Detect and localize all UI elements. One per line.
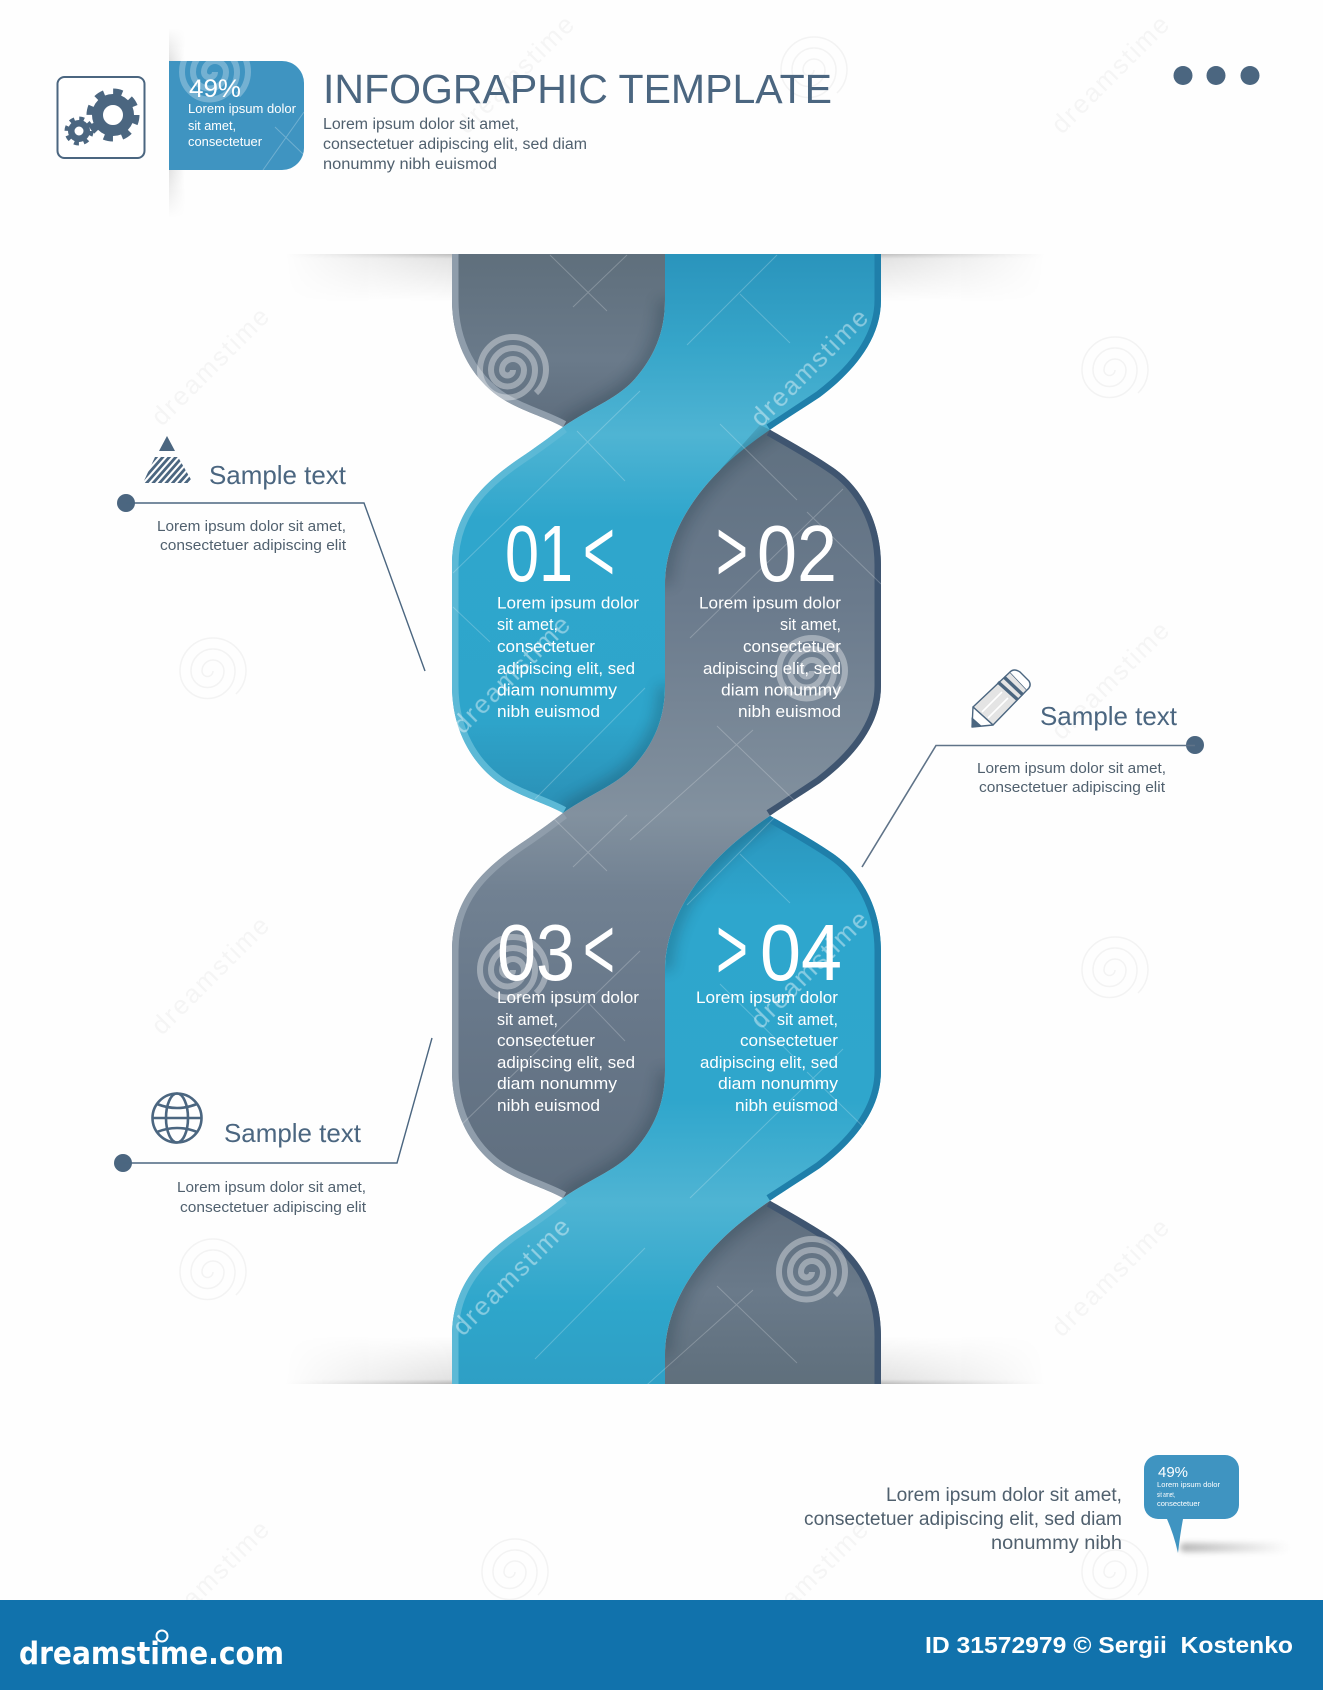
description: consectetuer adipiscing elit [160, 537, 347, 554]
ribbon watermark marks: dreamstime [744, 903, 875, 1034]
number 04: 04 [760, 908, 842, 997]
number 02: 02 [757, 509, 837, 598]
text block 04: nibh euismod [735, 1096, 838, 1115]
ribbon inner shadows [560, 298, 776, 1357]
faint background watermarks: dreamstime [1045, 1211, 1176, 1342]
speech bubble [1144, 1455, 1290, 1553]
icon: pyramid [131, 436, 211, 486]
icon: pencil [972, 670, 1030, 727]
faint background watermarks: dreamstime [1045, 614, 1176, 745]
ribbon watermark marks: dreamstime [744, 301, 875, 432]
chevron right: > [716, 899, 748, 998]
header [58, 39, 1260, 173]
callout: globe sample text [114, 1038, 432, 1216]
strand: blue upper S [452, 254, 881, 813]
chevron left: < [583, 501, 615, 600]
text block 01 [497, 594, 639, 721]
leader line [117, 494, 425, 671]
step 04 [696, 899, 842, 1115]
description: Lorem ipsum dolor sit amet, [177, 1179, 366, 1196]
strand: gray middle S [452, 425, 881, 1198]
icon: gears in rounded box [58, 77, 144, 158]
text block 03: sit amet, [497, 1010, 558, 1029]
footer logo text: dreamstime.com [19, 1636, 284, 1672]
subtitle: consectetuer adipiscing elit, sed diam [323, 136, 587, 153]
subtitle: nonummy nibh euismod [323, 156, 497, 173]
faint background watermarks: dreamstime [145, 300, 276, 431]
text block 02: consectetuer [743, 637, 841, 656]
speech bubble: Lorem ipsum dolor [1157, 1480, 1221, 1489]
text block 03: adipiscing elit, sed [497, 1053, 635, 1072]
text block 04: sit amet, [777, 1010, 838, 1029]
text block 03: consectetuer [497, 1031, 595, 1050]
ribbon watermark marks: dreamstime [446, 1210, 577, 1341]
step 03 [497, 899, 639, 1115]
description [157, 518, 347, 554]
panel shadows [169, 28, 1045, 1384]
description [977, 760, 1166, 796]
text block 03: Lorem ipsum dolor [497, 988, 639, 1007]
text block 01: adipiscing elit, sed [497, 659, 635, 678]
leader line [114, 1038, 432, 1172]
speech bubble: sit amet, [1157, 1490, 1175, 1499]
three dots [1174, 66, 1260, 85]
text block 02: sit amet, [780, 615, 841, 634]
title: INFOGRAPHIC TEMPLATE [323, 66, 832, 112]
icon: globe [152, 1094, 202, 1142]
bottom note text: nonummy nibh [991, 1533, 1122, 1554]
description: Lorem ipsum dolor sit amet, [977, 760, 1166, 777]
faint background watermarks: dreamstime [1045, 8, 1176, 139]
strand: gray bottom lobe [665, 1201, 881, 1384]
number 03: 03 [497, 908, 575, 997]
step 01 [497, 501, 639, 721]
heading: Sample text [209, 460, 347, 490]
text block 01: sit amet, [497, 615, 558, 634]
text block 04: adipiscing elit, sed [700, 1053, 838, 1072]
heading: Sample text [1040, 701, 1178, 731]
text block 02: adipiscing elit, sed [703, 659, 841, 678]
strand: blue lower S [452, 816, 881, 1384]
text block 03: nibh euismod [497, 1096, 600, 1115]
text block 02: Lorem ipsum dolor [699, 594, 841, 612]
faint background watermarks: dreamstime [145, 909, 276, 1040]
blue tab callout: consectetuer [188, 134, 263, 149]
leader line [862, 736, 1204, 867]
faint background watermarks: dreamstime [145, 1513, 276, 1644]
callout: pyramid sample text [117, 436, 425, 671]
text block 04: consectetuer [740, 1031, 838, 1050]
faint background watermarks: dreamstime [744, 1513, 875, 1644]
text block 01: Lorem ipsum dolor [497, 594, 639, 612]
blue tab callout: Lorem ipsum dolor [188, 101, 297, 116]
ribbon bevel edges [452, 254, 881, 1384]
text block 04: diam nonummy [718, 1074, 839, 1093]
ribbon: twisted blue and gray strands [446, 254, 881, 1400]
text block 03 [497, 988, 639, 1115]
footer credit: ID 31572979 © Sergii Kostenko [925, 1632, 1293, 1658]
number 01: 01 [505, 509, 573, 598]
text block 02 [699, 594, 842, 721]
chevron left: < [583, 899, 615, 998]
text block 02: nibh euismod [738, 702, 841, 721]
subtitle [323, 116, 587, 173]
text block 03: diam nonummy [497, 1074, 618, 1093]
footer bar [0, 1600, 1323, 1690]
heading: Sample text [224, 1118, 362, 1148]
description [177, 1179, 367, 1216]
faint background watermarks [145, 8, 1176, 1644]
speech bubble: 49% [1158, 1464, 1188, 1481]
text block 04: Lorem ipsum dolor [696, 988, 838, 1007]
text block 04 [696, 988, 839, 1115]
text block 02: diam nonummy [721, 680, 842, 700]
chevron right: > [716, 501, 748, 600]
text block 01: diam nonummy [497, 680, 618, 700]
description: Lorem ipsum dolor sit amet, [157, 518, 346, 535]
step 02 [699, 501, 842, 721]
strand: gray top lobe [452, 254, 665, 427]
speech bubble: consectetuer [1157, 1499, 1200, 1508]
bottom note text: Lorem ipsum dolor sit amet, [886, 1485, 1122, 1506]
subtitle: Lorem ipsum dolor sit amet, [323, 116, 519, 133]
text block 01: consectetuer [497, 637, 595, 656]
blue tab callout: 49% [189, 75, 241, 103]
ribbon watermark marks: dreamstime [446, 608, 577, 739]
faint background watermarks: dreamstime [450, 8, 581, 139]
blue tab callout: sit amet, [188, 118, 236, 133]
blue tab callout [169, 39, 304, 170]
description: consectetuer adipiscing elit [979, 779, 1166, 796]
bottom note text [804, 1485, 1122, 1554]
callout: pencil sample text [862, 670, 1204, 867]
text block 01: nibh euismod [497, 702, 600, 721]
bottom note text: consectetuer adipiscing elit, sed diam [804, 1509, 1122, 1530]
description: consectetuer adipiscing elit [180, 1199, 367, 1216]
ribbon watermark marks [446, 255, 881, 1400]
